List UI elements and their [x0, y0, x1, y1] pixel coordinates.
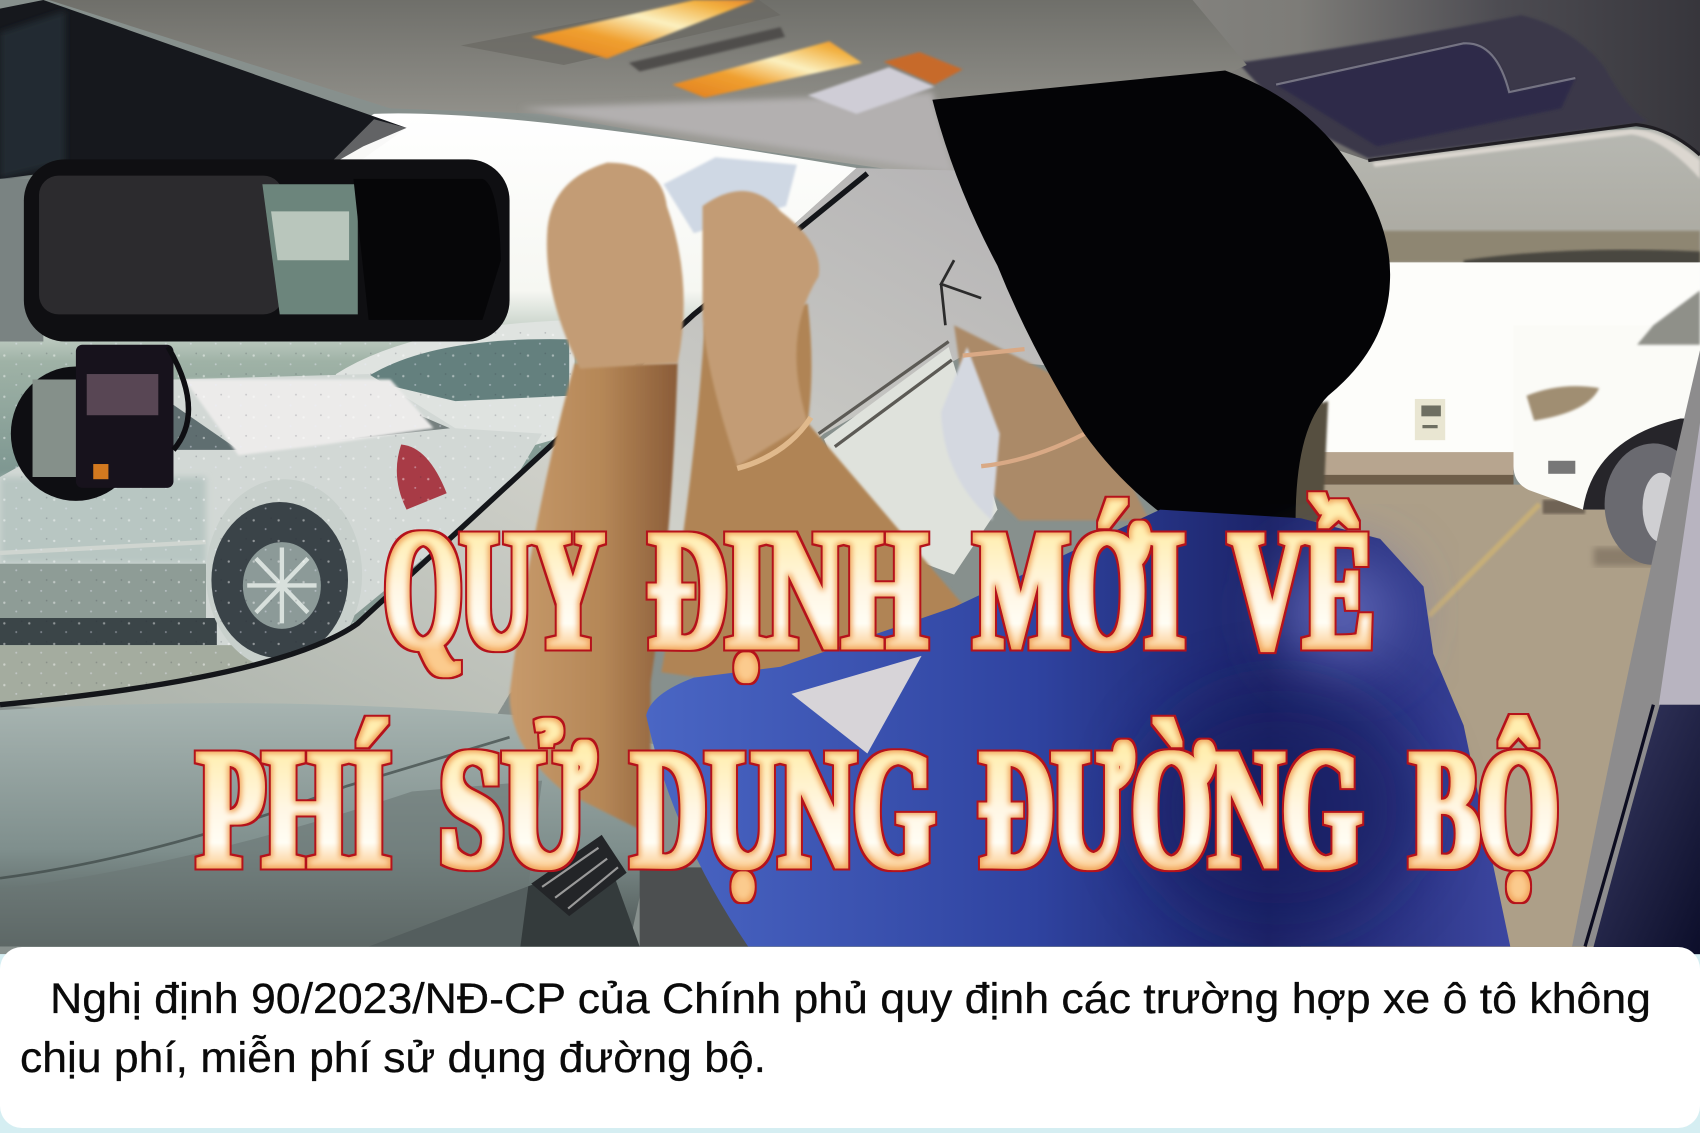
rearview mirror [0, 159, 510, 342]
intro text: Nghị định 90/2023/NĐ-CP của Chính phủ quy định các trường hợp xe ô tô không [50, 975, 1651, 1023]
face mask [941, 347, 1000, 520]
ceiling lights [461, 0, 963, 114]
left arm [510, 363, 678, 835]
arms [510, 157, 965, 835]
sticker in hands [664, 157, 797, 233]
right window scene [1301, 130, 1700, 954]
title line 2: ĐƯỜNG [980, 714, 1361, 903]
glasses [941, 260, 981, 325]
right hand [703, 191, 819, 466]
right door pillar [1572, 350, 1700, 946]
hair and neck [954, 325, 1149, 520]
rear car [325, 320, 575, 455]
blue shirt [646, 510, 1510, 946]
title line 1: ĐỊNH [649, 495, 926, 684]
ceiling headliner [0, 0, 1247, 179]
right arm [661, 304, 965, 683]
silver car [0, 374, 542, 656]
intro text [20, 975, 1651, 1082]
windshield outdoor view [0, 113, 857, 705]
intro text: chịu phí, miễn phí sử dụng đường bộ. [20, 1034, 766, 1082]
title line 2: DỤNG [632, 714, 934, 903]
title line 2: PHÍ [198, 714, 390, 903]
title line 2: BỘ [1411, 714, 1558, 903]
title line 1: MỚI [975, 495, 1184, 684]
headliner right and grab handle [1030, 0, 1700, 160]
left hand [547, 163, 684, 369]
title line 1: QUY [385, 495, 603, 684]
title line 1: VỀ [1230, 494, 1373, 684]
a-pillar and dashboard [0, 168, 1084, 748]
title [198, 494, 1558, 903]
dashcam [11, 345, 188, 501]
side window and face [824, 347, 997, 575]
title line 1 [385, 494, 1373, 684]
black sun visor left [0, 0, 407, 179]
black bucket hat [932, 70, 1390, 553]
title line 2 [198, 714, 1558, 903]
intro panel [0, 947, 1700, 1128]
title line 2: SỬ [440, 714, 594, 903]
